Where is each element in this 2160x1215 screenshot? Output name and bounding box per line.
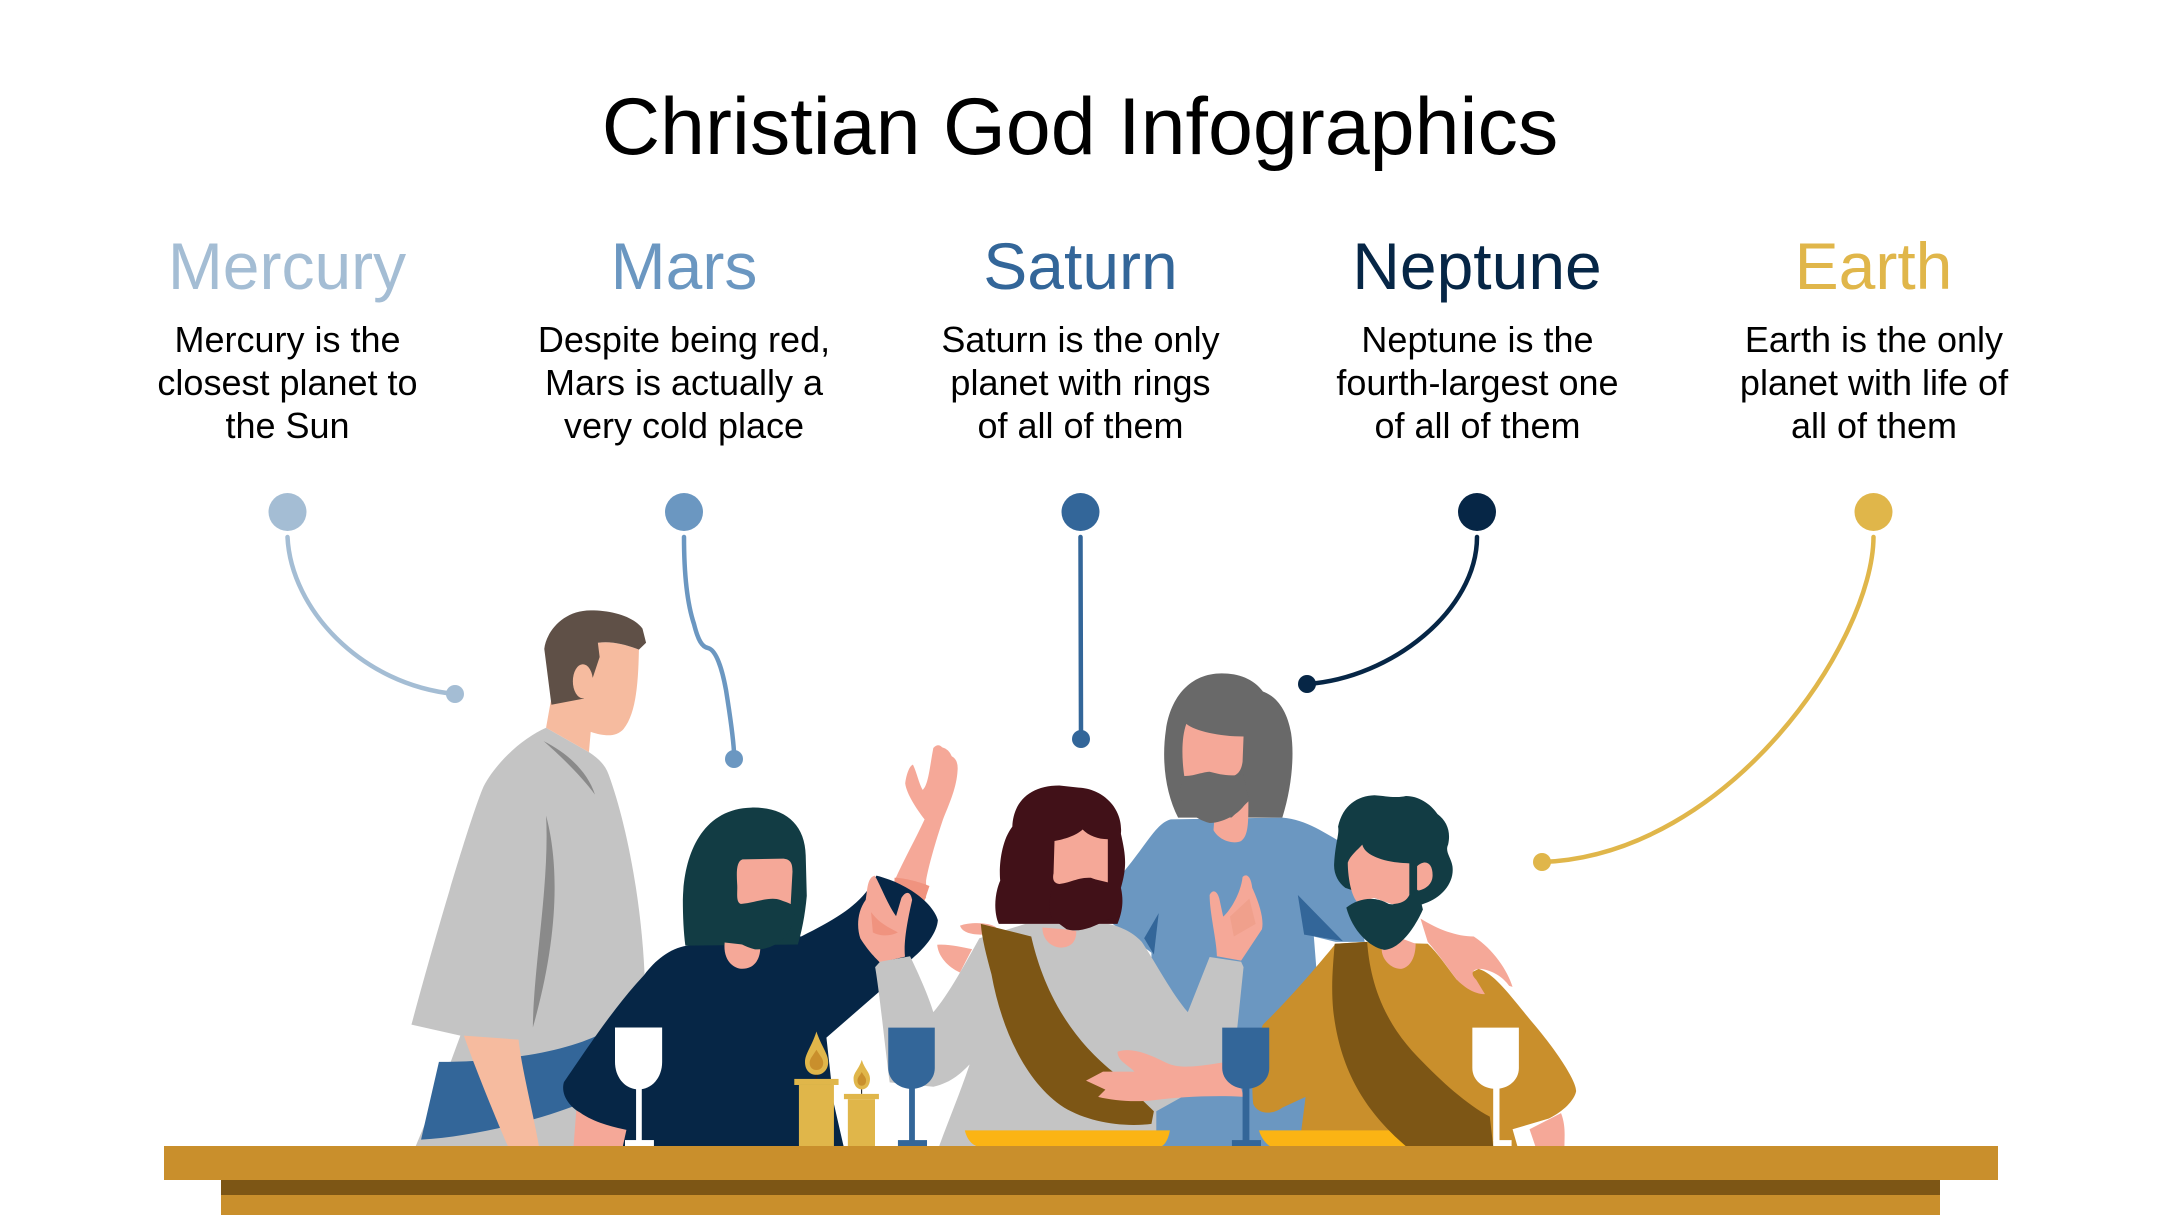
figure: raised arm of navy robed man [895,745,958,900]
goblet: right blue [1222,1028,1269,1147]
figure: gold robed man [1252,795,1576,1146]
figure: navy robed man [563,808,938,1146]
text: Earth description: all of them [1791,405,1957,446]
plate: centre [965,1130,1170,1146]
text: Mercury description: Mercury is the [174,319,401,360]
connector: Neptune [1298,493,1496,693]
connector: Mars [665,493,743,768]
table [164,1146,1998,1215]
column: Mars [538,229,830,768]
title: Christian God Infographics [602,82,1558,172]
goblet: left white [615,1027,662,1147]
text: Mercury description: the Sun [225,405,350,446]
column: Neptune [1298,229,1619,693]
figure: Jesus in grey robe [875,785,1262,1146]
text: Saturn description: Saturn is the only [941,319,1220,360]
heading: Saturn: Saturn [983,229,1178,303]
figure: standing man [411,610,646,1146]
column: Earth [1533,229,2009,871]
column: Mercury [157,229,464,703]
heading: Neptune: Neptune [1352,229,1602,303]
text: Neptune description: Neptune is the [1361,319,1594,360]
connector: Earth [1533,493,1892,871]
text: Saturn description: planet with rings [950,362,1211,403]
goblet: right white [1472,1028,1519,1141]
illustration: last supper figures [164,610,1998,1215]
text: Mercury description: closest planet to [157,362,418,403]
text: Mars description: very cold place [564,405,804,446]
candles [794,1032,879,1147]
connector: Saturn [1062,493,1100,748]
text: Mars description: Despite being red, [538,319,830,360]
text: Neptune description: fourth-largest one [1336,362,1619,403]
heading: Mars: Mars [611,229,757,303]
connector: Mercury [268,493,464,703]
text: Earth description: Earth is the only [1745,319,2003,360]
figure: arm of Jesus across chest [1086,1050,1244,1101]
goblet: left blue [888,1028,935,1147]
heading: Earth: Earth [1795,229,1952,303]
heading: Mercury: Mercury [168,229,406,303]
column: Saturn [941,229,1220,748]
text: Neptune description: of all of them [1374,405,1581,446]
figure: blue robed man [937,673,1365,1146]
text: Mars description: Mars is actually a [545,362,824,403]
text: Saturn description: of all of them [977,405,1184,446]
text: Earth description: planet with life of [1740,362,2009,403]
